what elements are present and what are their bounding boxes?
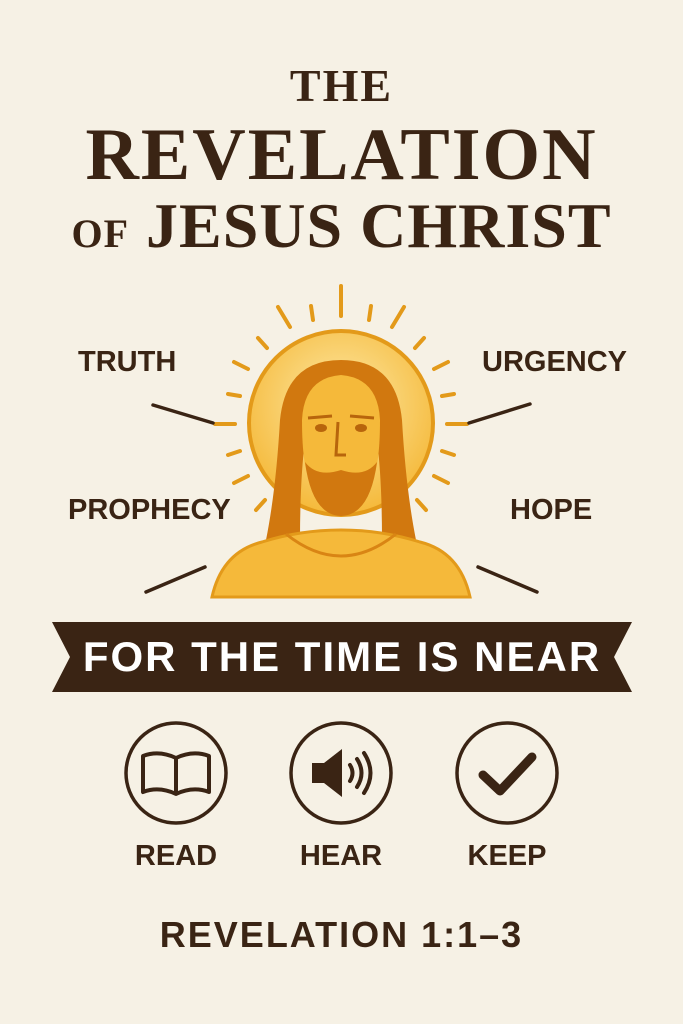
icon: check (KEEP) <box>455 721 559 825</box>
rays <box>215 286 467 510</box>
hair <box>266 360 416 540</box>
scripture reference: REVELATION 1:1–3 <box>160 914 523 955</box>
label: URGENCY: URGENCY <box>482 346 627 378</box>
caption: KEEP: KEEP <box>468 840 546 872</box>
label: HOPE: HOPE <box>510 494 592 526</box>
icon: speaker (HEAR) <box>289 721 393 825</box>
title line: THE: THE <box>290 60 393 111</box>
title line: REVELATION: REVELATION <box>85 114 598 196</box>
title <box>71 60 612 261</box>
label: TRUTH: TRUTH <box>78 346 176 378</box>
banner <box>52 622 632 692</box>
caption: HEAR: HEAR <box>300 840 382 872</box>
face <box>302 375 380 485</box>
icon: open book (READ) <box>124 721 228 825</box>
body <box>212 530 470 597</box>
banner: FOR THE TIME IS NEAR <box>83 633 601 680</box>
connector lines <box>146 404 537 592</box>
halo <box>249 331 433 515</box>
caption: READ: READ <box>135 840 217 872</box>
title line: OF JESUS CHRIST: OF JESUS CHRIST <box>71 190 612 261</box>
label: PROPHECY: PROPHECY <box>68 494 231 526</box>
beard <box>305 462 377 516</box>
